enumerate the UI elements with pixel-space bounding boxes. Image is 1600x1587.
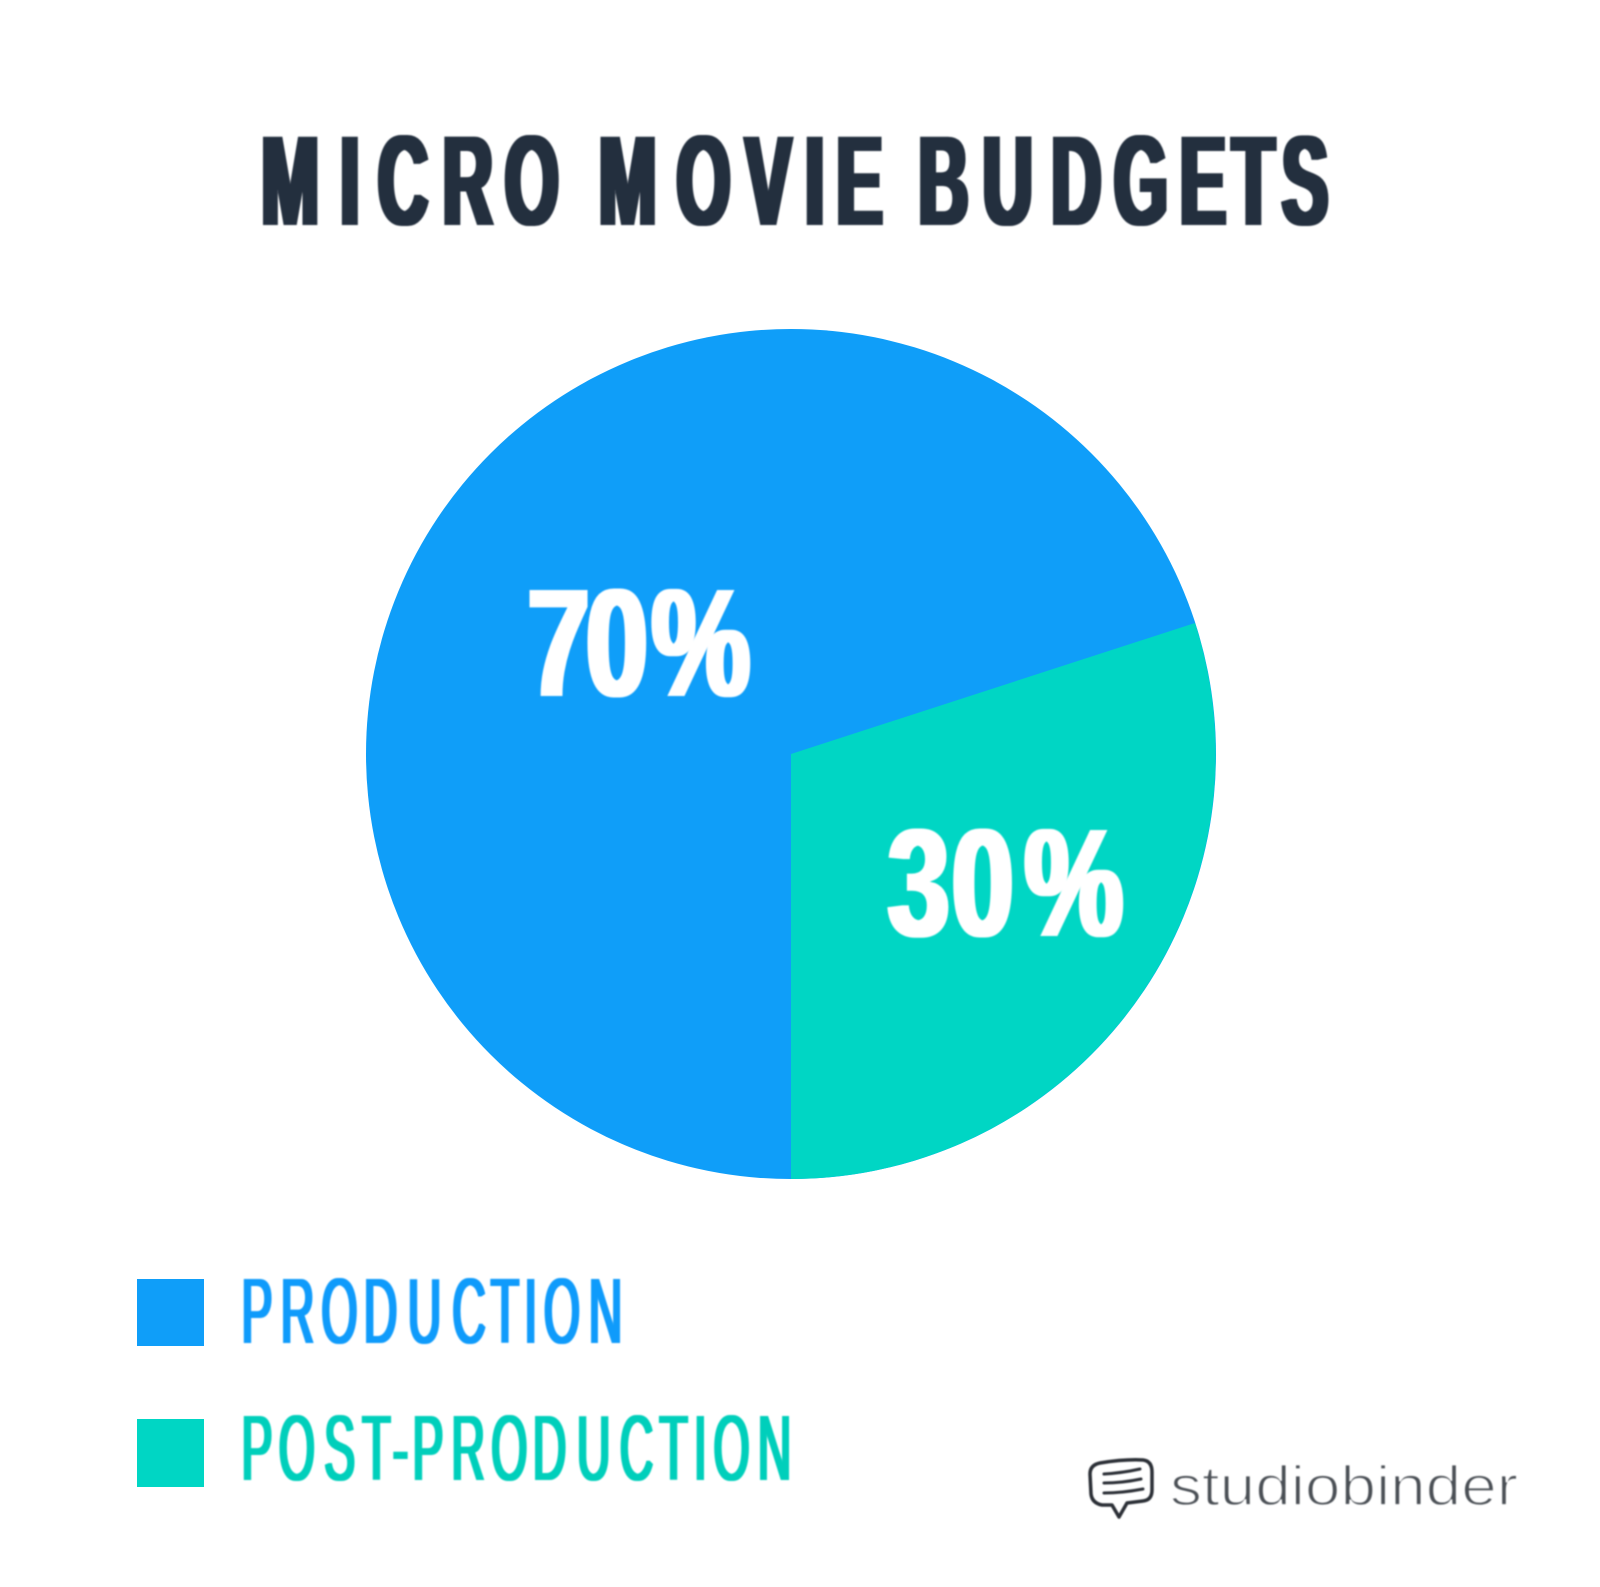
- wordmark: studiobinder: [1170, 1454, 1518, 1517]
- label: 70%: 70%: [528, 558, 750, 729]
- legend item: production: PRODUCTION: [242, 1258, 622, 1363]
- pie chart: [366, 329, 1216, 1179]
- label: 30%: 30%: [888, 798, 1123, 969]
- legend: [137, 1258, 791, 1500]
- icon: speech bubble: [1090, 1460, 1152, 1517]
- legend item: post-production: POST-PRODUCTION: [242, 1395, 791, 1500]
- title: MICRO MOVIE BUDGETS: [261, 109, 1328, 252]
- pie slice: production 70%: [366, 329, 1216, 1179]
- pie slice: post-production 30%: [791, 623, 1216, 1179]
- logo: studiobinder: [1090, 1454, 1518, 1517]
